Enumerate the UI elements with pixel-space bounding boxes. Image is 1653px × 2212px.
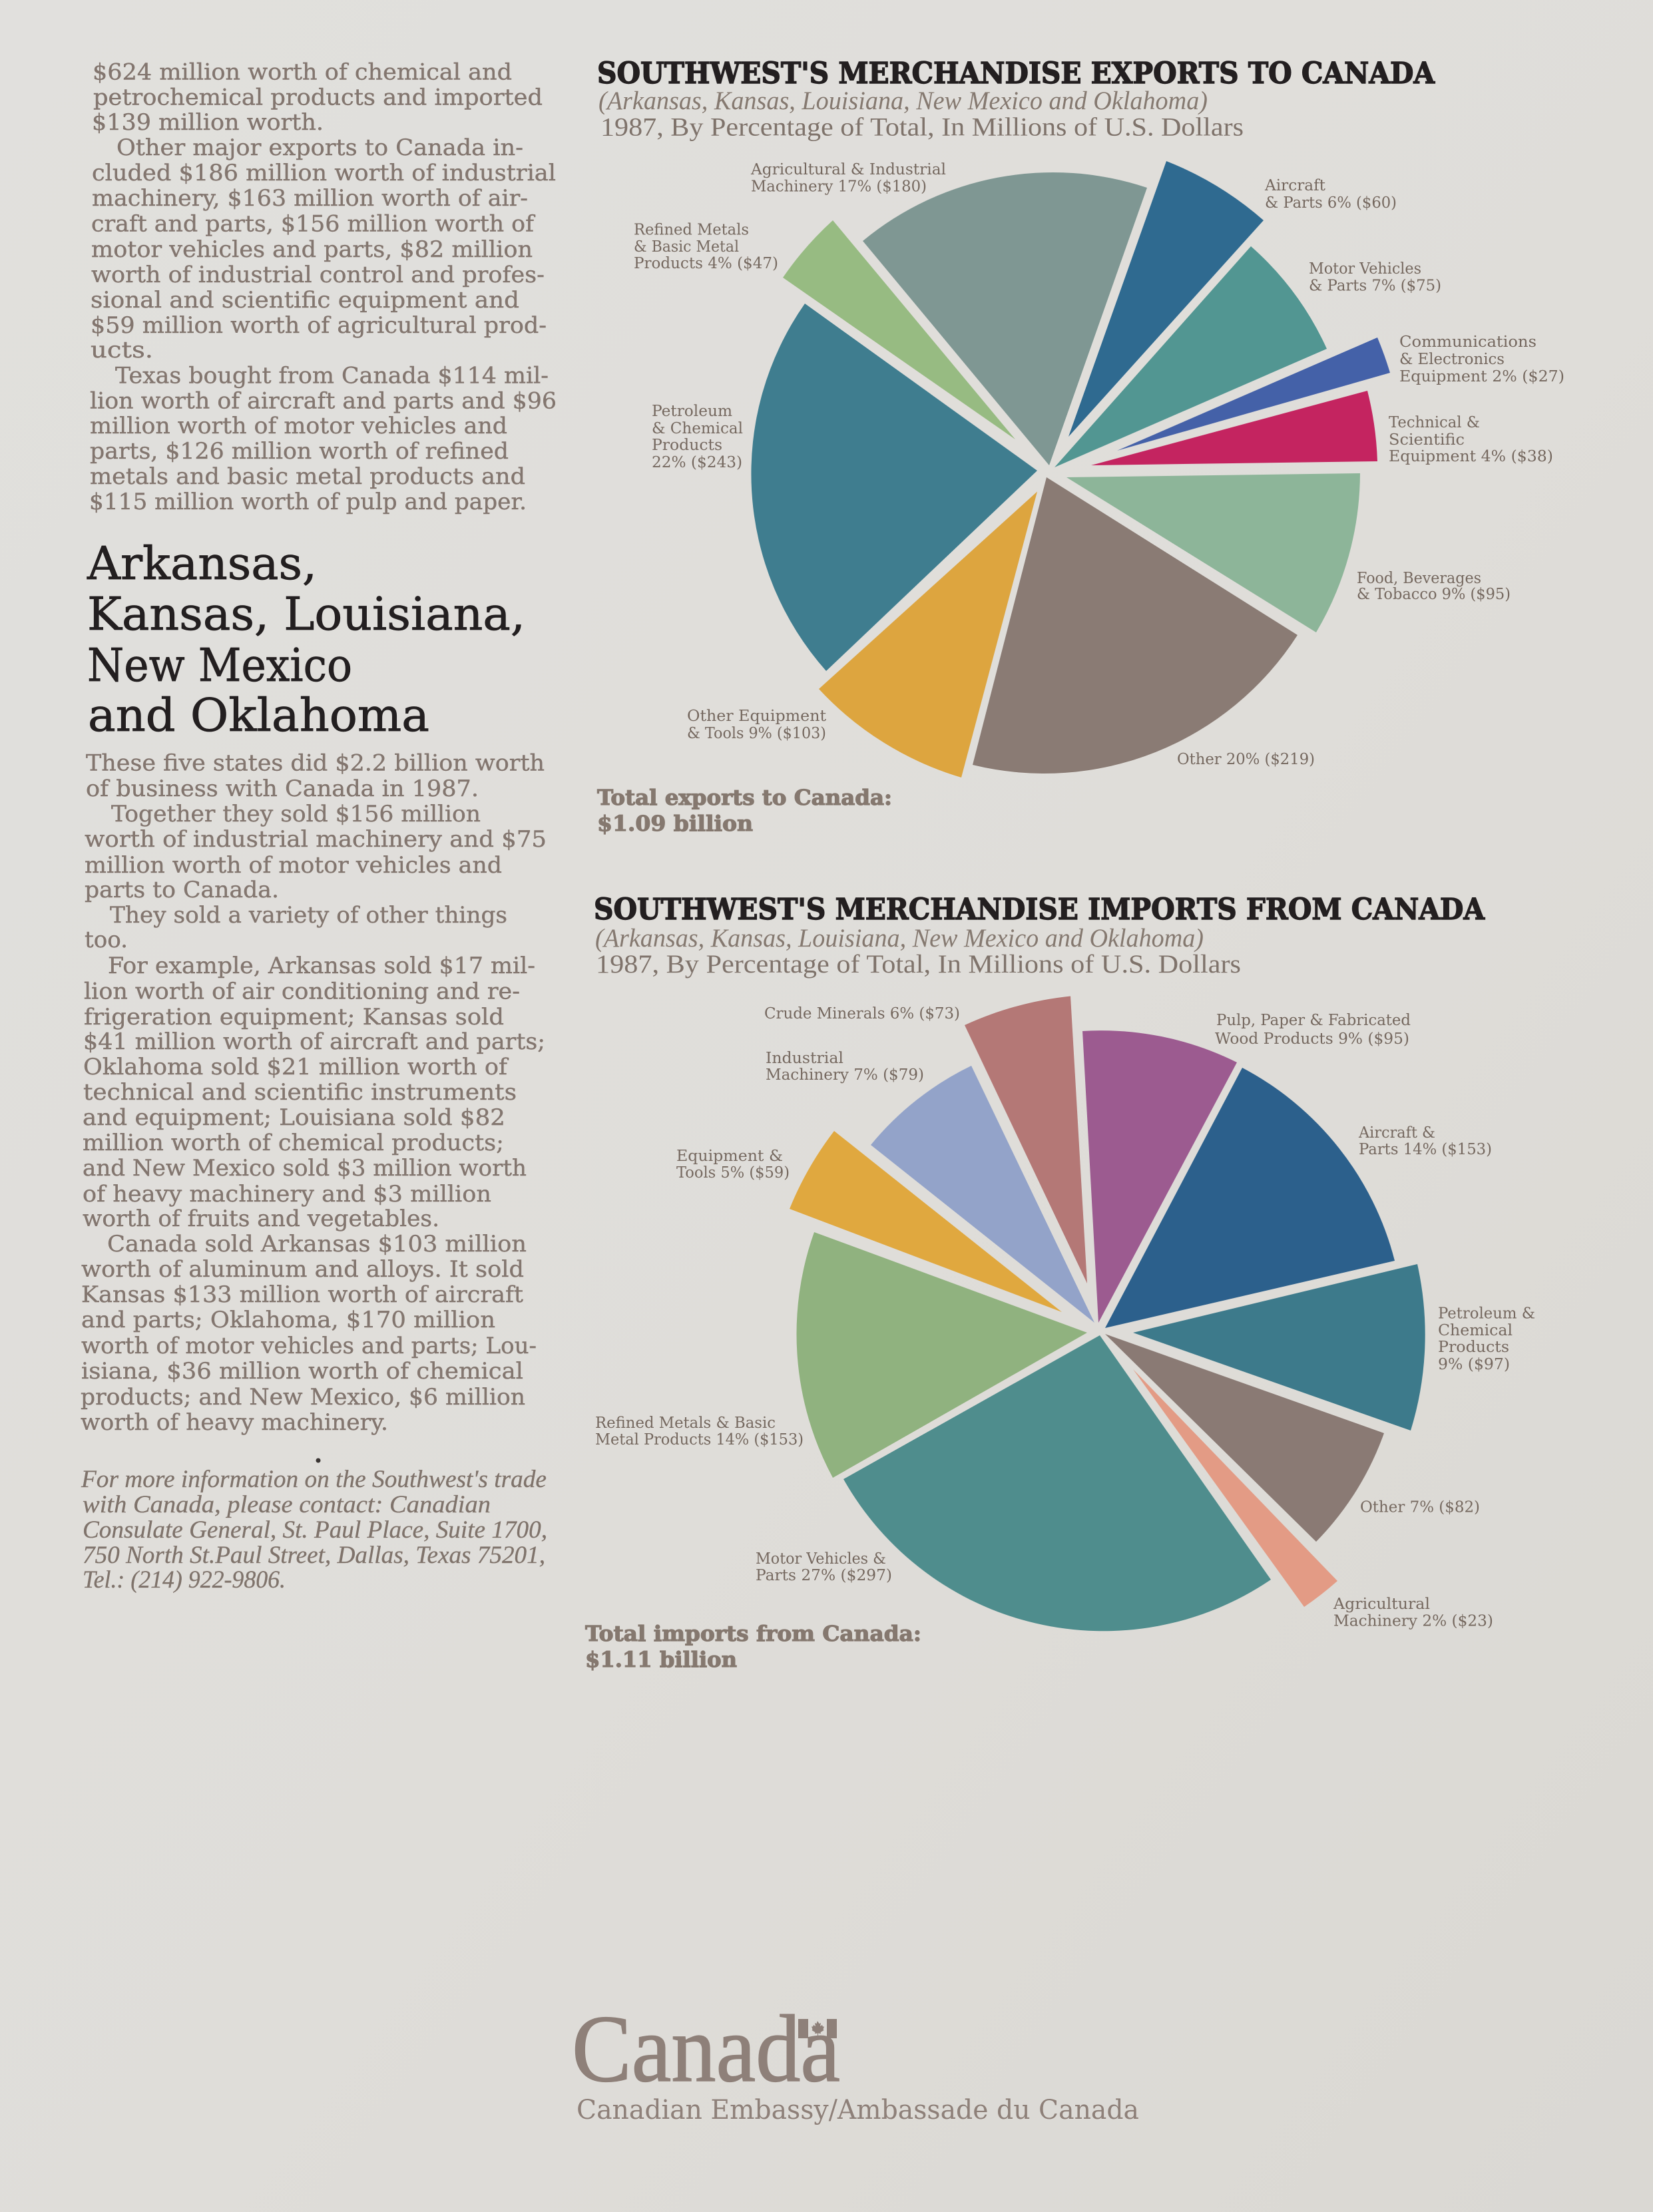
paragraph: Texas trade continued: million worth of motor vehicles and: [90, 413, 507, 439]
label: refined metals: Refined Metals: [634, 222, 749, 239]
label: petroleum: Products: [1438, 1339, 1509, 1356]
paragraph: five states trade: worth of fruits and vegetables.: [83, 1206, 439, 1232]
paragraph: five states trade: Kansas $133 million worth of aircraft: [81, 1281, 523, 1308]
label: aircraft: Parts 14% ($153): [1359, 1141, 1492, 1158]
label: food: [1357, 570, 1511, 603]
label: pulp and paper: Wood Products 9% ($95): [1215, 1030, 1409, 1048]
heading: five states: [87, 538, 525, 742]
paragraph: five states trade: frigeration equipment; Kansas sold: [84, 1004, 504, 1030]
label: industrial machinery: [766, 1050, 924, 1084]
label: petroleum: Petroleum: [652, 403, 732, 420]
total exports: Total exports to Canada:: [597, 785, 892, 810]
paragraph: Texas trade continued: parts, $126 million worth of refined: [90, 438, 509, 465]
label: food: & Tobacco 9% ($95): [1357, 586, 1511, 603]
paragraph: five states trade: too.: [85, 927, 128, 953]
label: agricultural machinery: Agricultural: [1333, 1596, 1430, 1613]
contact note: Consulate General, St. Paul Place, Suite 1700,: [83, 1516, 547, 1544]
label: aircraft: Aircraft: [1264, 177, 1326, 194]
exports title: SOUTHWEST'S MERCHANDISE EXPORTS TO CANADA: [597, 57, 1435, 91]
exports units line: 1987, By Percentage of Total, In Millions of U.S. Dollars: [600, 113, 1244, 141]
paragraph: five states trade: They sold a variety of other things: [110, 902, 507, 929]
logo: Canada wordmark: Canada: [572, 1996, 840, 2102]
heading: five states: Arkansas,: [87, 538, 317, 590]
paragraph: Texas trade continued: craft and parts, $156 million worth of: [91, 211, 535, 238]
label: technical equipment: [1389, 414, 1553, 465]
label: aircraft: [1358, 1124, 1492, 1158]
label: other equipment: [687, 708, 827, 742]
panel: exports to Canada: [597, 57, 1564, 836]
paragraph: Texas trade continued: Other major exports to Canada in-: [117, 134, 523, 161]
label: motor vehicles: [1309, 260, 1441, 294]
paragraph: Texas trade continued: $624 million worth of chemical and: [93, 59, 512, 86]
label: refined metals: Products 4% ($47): [634, 255, 778, 272]
label: motor vehicles: Parts 27% ($297): [756, 1567, 892, 1584]
paragraph: five states trade: Together they sold $156 million: [111, 801, 481, 827]
label: aircraft: Aircraft &: [1358, 1124, 1435, 1142]
label: petroleum: & Chemical: [652, 420, 743, 437]
label: refined metals: [595, 1415, 804, 1448]
contact note: For more information on the Southwest's trade: [81, 1466, 547, 1493]
paragraph: five states trade: and New Mexico sold $3 million worth: [83, 1155, 527, 1182]
paragraph: five states trade: isiana, $36 million worth of chemical: [81, 1358, 523, 1385]
paragraph: five states trade: These five states did $2.2 billion worth: [86, 750, 545, 777]
label: food: Food, Beverages: [1357, 570, 1481, 587]
footer: embassy name: Canadian Embassy/Ambassade du Canada: [577, 2095, 1139, 2125]
label: communications: Equipment 2% ($27): [1399, 368, 1564, 385]
paragraph: five states trade: lion worth of air conditioning and re-: [84, 979, 520, 1005]
imports units line: 1987, By Percentage of Total, In Millions of U.S. Dollars: [596, 950, 1241, 979]
label: technical equipment: Technical &: [1389, 414, 1480, 431]
pie chart: imports: [790, 996, 1425, 1631]
paragraph: Texas trade continued: ucts.: [91, 337, 153, 363]
paragraph: Texas trade continued: lion worth of aircraft and parts and $96: [90, 387, 557, 414]
label: equipment and tools: [676, 1148, 790, 1182]
label: pulp and paper: Pulp, Paper & Fabricated: [1216, 1012, 1411, 1029]
label: petroleum: 22% ($243): [652, 454, 742, 471]
label: petroleum: 9% ($97): [1438, 1356, 1510, 1373]
label: agricultural machinery: Machinery 2% ($23): [1333, 1612, 1493, 1630]
label: other equipment: & Tools 9% ($103): [687, 725, 826, 742]
icon: Canadian flag: [798, 2019, 837, 2038]
label: aircraft: [1264, 177, 1397, 212]
paragraph: five states trade: and parts; Oklahoma, $170 million: [81, 1307, 495, 1333]
total imports: [585, 1621, 921, 1672]
imports title: SOUTHWEST'S MERCHANDISE IMPORTS FROM CANADA: [594, 893, 1485, 927]
left text column: [81, 59, 557, 1594]
label: other equipment: Other Equipment: [687, 708, 827, 725]
pie chart: exports: [751, 161, 1390, 777]
total imports: Total imports from Canada:: [585, 1621, 921, 1646]
paragraph: Texas trade continued: motor vehicles and parts, $82 million: [91, 236, 533, 263]
label: refined metals: Metal Products 14% ($153): [595, 1431, 804, 1448]
label: petroleum: Products: [652, 437, 722, 454]
label: equipment and tools: Tools 5% ($59): [676, 1164, 790, 1182]
paragraph: five states trade: million worth of motor vehicles and: [85, 852, 502, 879]
label: equipment and tools: Equipment &: [676, 1148, 783, 1165]
label: communications: & Electronics: [1399, 351, 1505, 368]
label: refined metals: & Basic Metal: [634, 238, 739, 256]
paragraph: Texas trade continued: sional and scientific equipment and: [91, 287, 519, 314]
label: motor vehicles: Motor Vehicles &: [756, 1550, 886, 1568]
paragraph: five states trade: parts to Canada.: [85, 877, 279, 903]
paragraph: Texas trade continued: $59 million worth of agricultural prod-: [91, 312, 547, 339]
heading: five states: Kansas, Louisiana,: [87, 588, 525, 641]
label: industrial machinery: Industrial: [766, 1050, 843, 1067]
exports subtitle: (Arkansas, Kansas, Louisiana, New Mexico and Oklahoma): [598, 87, 1208, 115]
total exports: [597, 785, 892, 836]
paragraph: five states trade: For example, Arkansas sold $17 mil-: [108, 953, 535, 979]
label: crude minerals: Crude Minerals 6% ($73): [764, 1005, 960, 1022]
paragraph: Texas trade continued: worth of industrial control and profes-: [91, 262, 545, 288]
paragraph: five states trade: worth of heavy machinery.: [81, 1409, 388, 1436]
label: communications: Communications: [1399, 333, 1536, 351]
contact note: Tel.: (214) 922-9806.: [83, 1566, 286, 1594]
label: refined metals: Refined Metals & Basic: [595, 1415, 776, 1432]
label: refined metals: [634, 222, 778, 272]
paragraph: Texas trade continued: petrochemical products and imported: [93, 84, 543, 111]
paragraph: Texas trade continued: machinery, $163 million worth of air-: [92, 185, 528, 212]
label: motor vehicles: [756, 1550, 892, 1584]
contact note: [81, 1466, 547, 1594]
label: motor vehicles: Motor Vehicles: [1309, 260, 1421, 278]
label: petroleum: Chemical: [1438, 1322, 1513, 1339]
contact note: with Canada, please contact: Canadian: [83, 1491, 491, 1518]
paragraph: Texas trade continued: cluded $186 million worth of industrial: [92, 160, 556, 186]
paragraph: Texas trade continued: $115 million worth of pulp and paper.: [89, 489, 527, 515]
label: other: Other 7% ($82): [1360, 1499, 1480, 1516]
paragraph: five states trade: $41 million worth of aircraft and parts;: [83, 1028, 545, 1055]
label: aircraft: & Parts 6% ($60): [1265, 194, 1397, 212]
total exports: $1.09 billion: [597, 811, 753, 836]
paragraph: five states trade: Canada sold Arkansas $103 million: [107, 1231, 527, 1257]
label: communications: [1399, 333, 1564, 385]
contact note: 750 North St.Paul Street, Dallas, Texas 75201,: [83, 1542, 545, 1569]
paragraph: five states trade: and equipment; Louisiana sold $82: [83, 1104, 505, 1131]
label: petroleum: [1438, 1305, 1535, 1373]
paragraph: Texas trade continued: metals and basic metal products and: [90, 463, 525, 490]
label: petroleum: [652, 403, 743, 471]
label: other: Other 20% ($219): [1177, 751, 1315, 768]
panel: imports from Canada: [585, 893, 1535, 1672]
paragraph: five states trade: technical and scientific instruments: [83, 1079, 517, 1106]
paragraph: five states trade: products; and New Mexico, $6 million: [81, 1384, 525, 1411]
label: pulp and paper: [1215, 1012, 1411, 1048]
label: industrial machinery: Machinery 7% ($79): [766, 1066, 924, 1084]
paragraph: Texas trade continued: [89, 59, 557, 515]
label: petroleum: Petroleum &: [1438, 1305, 1535, 1322]
heading: five states: and Oklahoma: [88, 690, 429, 742]
paragraph: five states trade: million worth of chemical products;: [83, 1130, 504, 1156]
paragraph: five states trade: worth of industrial machinery and $75: [85, 826, 547, 853]
paragraph: Texas trade continued: $139 million worth.: [92, 109, 324, 136]
paragraph: five states trade: Oklahoma sold $21 million worth of: [83, 1054, 509, 1080]
label: agricultural machinery: [1333, 1596, 1493, 1630]
paragraph: five states trade: worth of aluminum and alloys. It sold: [81, 1256, 524, 1283]
total imports: $1.11 billion: [585, 1647, 737, 1672]
label: agricultural machinery: Machinery 17% ($180): [751, 178, 927, 196]
label: technical equipment: Equipment 4% ($38): [1389, 448, 1553, 465]
heading: five states: New Mexico: [87, 640, 352, 692]
label: motor vehicles: & Parts 7% ($75): [1309, 277, 1441, 294]
label: technical equipment: Scientific: [1389, 431, 1465, 449]
paragraph: five states trade: of business with Canada in 1987.: [86, 775, 479, 802]
imports subtitle: (Arkansas, Kansas, Louisiana, New Mexico and Oklahoma): [595, 924, 1204, 953]
label: agricultural machinery: [750, 161, 946, 196]
paragraph: five states trade: [81, 750, 547, 1436]
paragraph: five states trade: worth of motor vehicles and parts; Lou-: [81, 1333, 537, 1359]
label: agricultural machinery: Agricultural & Industrial: [750, 161, 946, 178]
paragraph: Texas trade continued: Texas bought from Canada $114 mil-: [115, 363, 549, 389]
paragraph: five states trade: of heavy machinery and $3 million: [83, 1181, 491, 1208]
